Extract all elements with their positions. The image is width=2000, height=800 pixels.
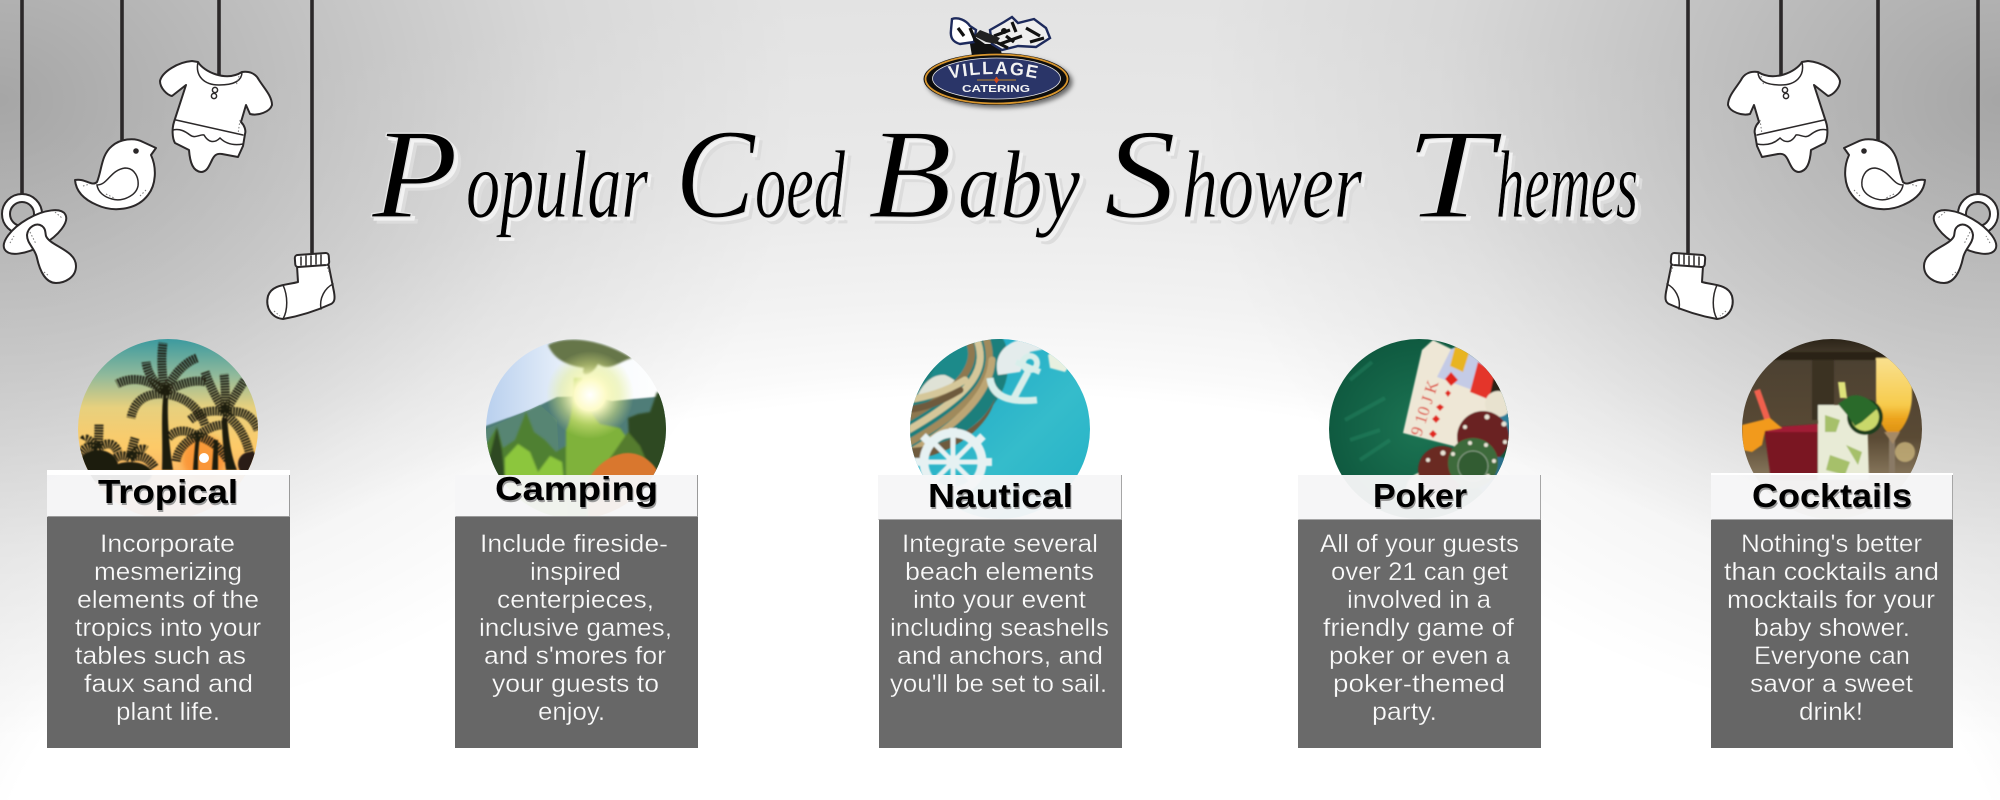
panel: Nautical	[878, 335, 1122, 748]
description: beach elements	[905, 558, 1094, 586]
heading: Camping	[495, 470, 658, 507]
icon: bird	[75, 0, 156, 209]
title: B	[868, 103, 952, 245]
description	[1320, 530, 1519, 726]
photo: three cocktails at a bar	[1742, 339, 1922, 478]
text box	[879, 520, 1122, 748]
description: your guests to	[492, 670, 659, 698]
icon: pacifier	[0, 0, 76, 283]
photo: palm trees at sunset	[78, 339, 258, 486]
text box	[455, 517, 698, 748]
description: poker or even a	[1329, 642, 1510, 670]
heading: Cocktails	[1752, 477, 1912, 514]
description: than cocktails and	[1724, 558, 1939, 586]
text box	[47, 517, 290, 748]
description: tropics into your	[75, 614, 261, 642]
description: faux sand and	[84, 670, 253, 698]
panel: Poker	[1298, 339, 1541, 748]
photo: playing cards and poker chips on green felt	[1329, 339, 1526, 519]
description: elements of the	[77, 586, 259, 614]
title band	[878, 475, 1121, 520]
logo wordmark: VILLAGE	[948, 62, 1038, 78]
description: over 21 can get	[1331, 558, 1508, 586]
text box	[1298, 520, 1541, 748]
description: including seashells	[890, 614, 1109, 642]
description: Nothing's better	[1741, 530, 1922, 558]
hanging mobile: right	[1665, 0, 2000, 319]
description: friendly game of	[1323, 614, 1514, 642]
logo divider	[977, 79, 1016, 81]
title: hemes	[1496, 131, 1638, 238]
title: opular	[466, 131, 648, 238]
description: you'll be set to sail.	[890, 670, 1107, 698]
description: mesmerizing	[94, 558, 242, 586]
description	[1724, 530, 1939, 726]
description: centerpieces,	[497, 586, 654, 614]
description: Include fireside-	[480, 530, 668, 558]
description: inclusive games,	[479, 614, 672, 642]
heading: Nautical	[928, 477, 1073, 514]
description: inspired	[530, 558, 621, 586]
description: Everyone can	[1754, 642, 1910, 670]
icon: pacifier right	[1924, 0, 2000, 283]
photo: rope, anchor and ship wheel on teal wood	[905, 335, 1090, 519]
description: and anchors, and	[897, 642, 1103, 670]
band edge	[456, 475, 698, 516]
description: Integrate several	[902, 530, 1098, 558]
icon: baby onesie right	[1728, 0, 1840, 172]
photo: playing cards and poker chips on green felt: 9 10 J K	[1407, 377, 1443, 438]
heading: Poker	[1373, 477, 1467, 514]
description: involved in a	[1347, 586, 1491, 614]
icon: baby onesie	[160, 0, 272, 172]
description: tables such as	[75, 642, 246, 670]
title band	[1298, 475, 1541, 520]
band edge	[1298, 475, 1540, 520]
title: T	[1405, 103, 1503, 245]
logo subtitle: CATERING	[962, 83, 1030, 95]
title: P	[371, 103, 458, 245]
band edge	[1712, 475, 1952, 520]
title: C	[675, 103, 757, 245]
band edge	[48, 475, 290, 516]
title band	[455, 475, 698, 517]
description: drink!	[1799, 698, 1863, 726]
description	[479, 530, 672, 726]
description: and s'mores for	[484, 642, 666, 670]
photo: mountain forest campsite	[480, 339, 670, 520]
logo mascots	[951, 17, 1050, 56]
description: Incorporate	[100, 530, 235, 558]
description: baby shower.	[1754, 614, 1910, 642]
icon: bird right	[1844, 0, 1925, 209]
description: plant life.	[116, 698, 220, 726]
description	[75, 530, 261, 726]
description: All of your guests	[1320, 530, 1519, 558]
title band	[1711, 475, 1953, 520]
panel: Cocktails	[1711, 339, 1953, 748]
hanging mobile: left	[0, 0, 335, 319]
logo oval	[924, 53, 1070, 105]
title: oed	[755, 131, 846, 238]
panel: Camping	[455, 339, 698, 748]
title band	[47, 475, 290, 517]
heading: Tropical	[98, 473, 238, 510]
title band top edge	[1711, 473, 1953, 475]
title: aby	[958, 131, 1080, 238]
logo: Village Catering	[924, 16, 1076, 112]
description: savor a sweet	[1750, 670, 1913, 698]
description: poker-themed	[1333, 670, 1505, 698]
band edge	[878, 475, 1122, 520]
logo diamond	[994, 76, 999, 84]
description: party.	[1372, 698, 1437, 726]
icon: sock	[267, 0, 335, 319]
description: enjoy.	[538, 698, 605, 726]
panel: Tropical	[47, 339, 290, 748]
title	[371, 103, 1638, 245]
icon: sock right	[1665, 0, 1733, 319]
description: into your event	[913, 586, 1086, 614]
title: S	[1104, 103, 1176, 245]
title band top edge	[47, 470, 290, 475]
description	[890, 530, 1109, 698]
text box	[1711, 520, 1953, 748]
description: mocktails for your	[1727, 586, 1935, 614]
title: hower	[1182, 131, 1362, 238]
